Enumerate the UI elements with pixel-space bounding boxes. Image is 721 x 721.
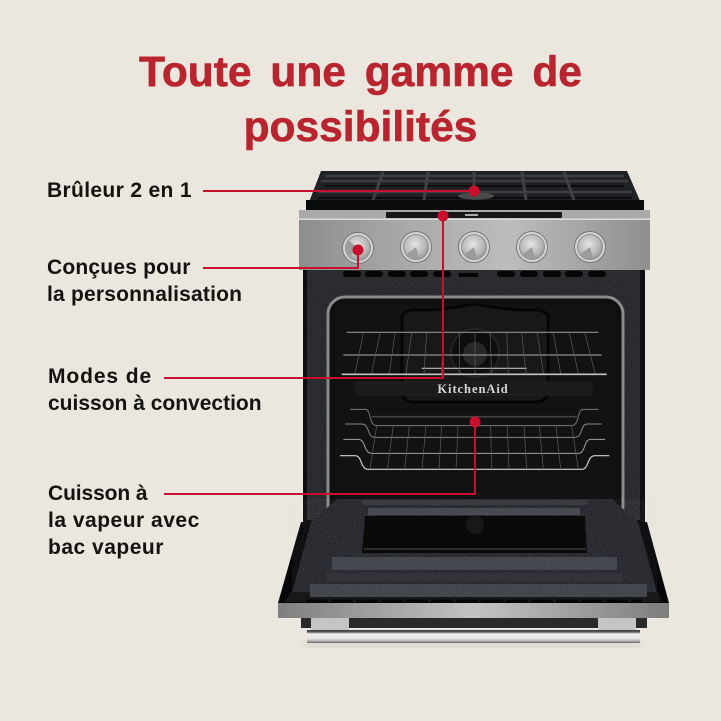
- title: possibilités: [244, 104, 477, 151]
- oven cavity: [328, 297, 623, 522]
- upper oven rack: [342, 332, 607, 374]
- KitchenAid brand bar: KitchenAid: [437, 382, 509, 396]
- open oven door: [278, 499, 669, 603]
- title: Toute une gamme de: [139, 49, 582, 96]
- vent slots: [343, 271, 606, 277]
- label: customisation: [47, 256, 242, 306]
- oven body: [303, 270, 645, 525]
- label: steam: la vapeur avec: [48, 509, 200, 532]
- label: convection: Modes de: [48, 365, 152, 388]
- callout dots: [352, 186, 480, 428]
- label: steam: bac vapeur: [48, 536, 164, 559]
- label: steam: Cuisson à: [48, 482, 147, 505]
- label: customisation: Conçues pour: [47, 256, 191, 279]
- shadow under handle: [305, 641, 640, 647]
- label: customisation: la personnalisation: [47, 283, 242, 306]
- knobs: [342, 232, 606, 264]
- door steel band and handle: [278, 603, 669, 643]
- label: convection: [48, 365, 262, 415]
- callout lines: [164, 191, 475, 494]
- label: convection: cuisson à convection: [48, 392, 262, 415]
- label: burner: Brûleur 2 en 1: [47, 179, 192, 202]
- label: steam: [48, 482, 200, 559]
- lower oven racks: [340, 409, 609, 469]
- title: [139, 49, 582, 151]
- KitchenAid brand bar: [356, 382, 592, 396]
- control panel: [299, 210, 650, 270]
- cooktop: [306, 171, 644, 210]
